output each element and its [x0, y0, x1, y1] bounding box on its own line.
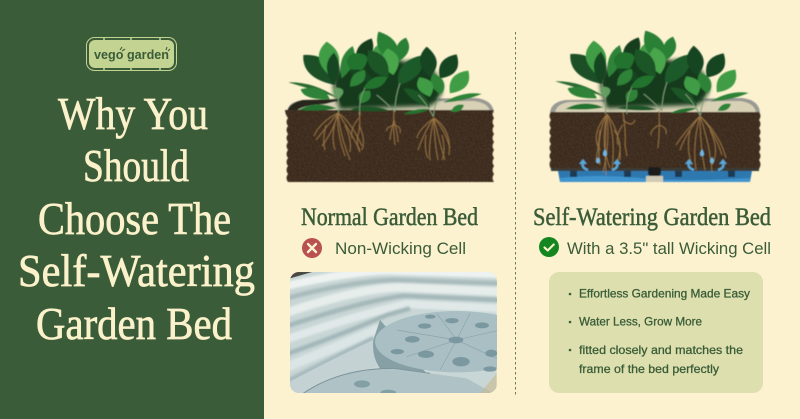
illustration: self-watering garden bed with plants, soil and reservoir: [548, 31, 762, 182]
panel: green title sidebar: [0, 0, 264, 419]
title: why you should choose the self-watering garden bed: Why You: [58, 88, 208, 139]
title: why you should choose the self-watering garden bed: [18, 88, 255, 349]
logo: vego garden: vego garden: [94, 47, 169, 62]
column divider: [514, 32, 516, 396]
title: why you should choose the self-watering garden bed: Garden Bed: [36, 298, 232, 349]
logo: vego garden: [86, 37, 176, 71]
illustration: normal garden bed with plants and soil: [285, 32, 494, 182]
benefit list text: fitted closely and matches the: [579, 343, 743, 357]
title: why you should choose the self-watering garden bed: Self-Watering: [18, 245, 255, 296]
heading: normal garden bed: Normal Garden Bed: [301, 202, 478, 231]
icon: green check: [539, 237, 559, 257]
heading: self-watering garden bed: Self-Watering Garden Bed: [533, 202, 771, 231]
title: why you should choose the self-watering garden bed: Choose The: [38, 193, 231, 244]
label: with a 3.5 inch tall wicking cell: With a 3.5" tall Wicking Cell: [567, 239, 771, 258]
benefit list text: frame of the bed perfectly: [579, 362, 719, 376]
benefit list text: Water Less, Grow More: [579, 314, 702, 328]
benefit list text: [579, 286, 750, 376]
title: why you should choose the self-watering garden bed: Should: [83, 140, 189, 191]
icon: red cross: [302, 238, 322, 258]
label: non-wicking cell: Non-Wicking Cell: [335, 239, 466, 258]
photo: non-wicking cell inside a metal bed: [290, 272, 497, 393]
roots: normal bed: [314, 110, 450, 160]
panel: self-watering benefits: [549, 272, 763, 393]
water droplets and wicking arrows: [579, 149, 727, 170]
benefit list text: Effortless Gardening Made Easy: [579, 286, 750, 300]
roots: self-watering bed: [596, 110, 726, 175]
reservoir: blue water cells: [551, 167, 759, 182]
